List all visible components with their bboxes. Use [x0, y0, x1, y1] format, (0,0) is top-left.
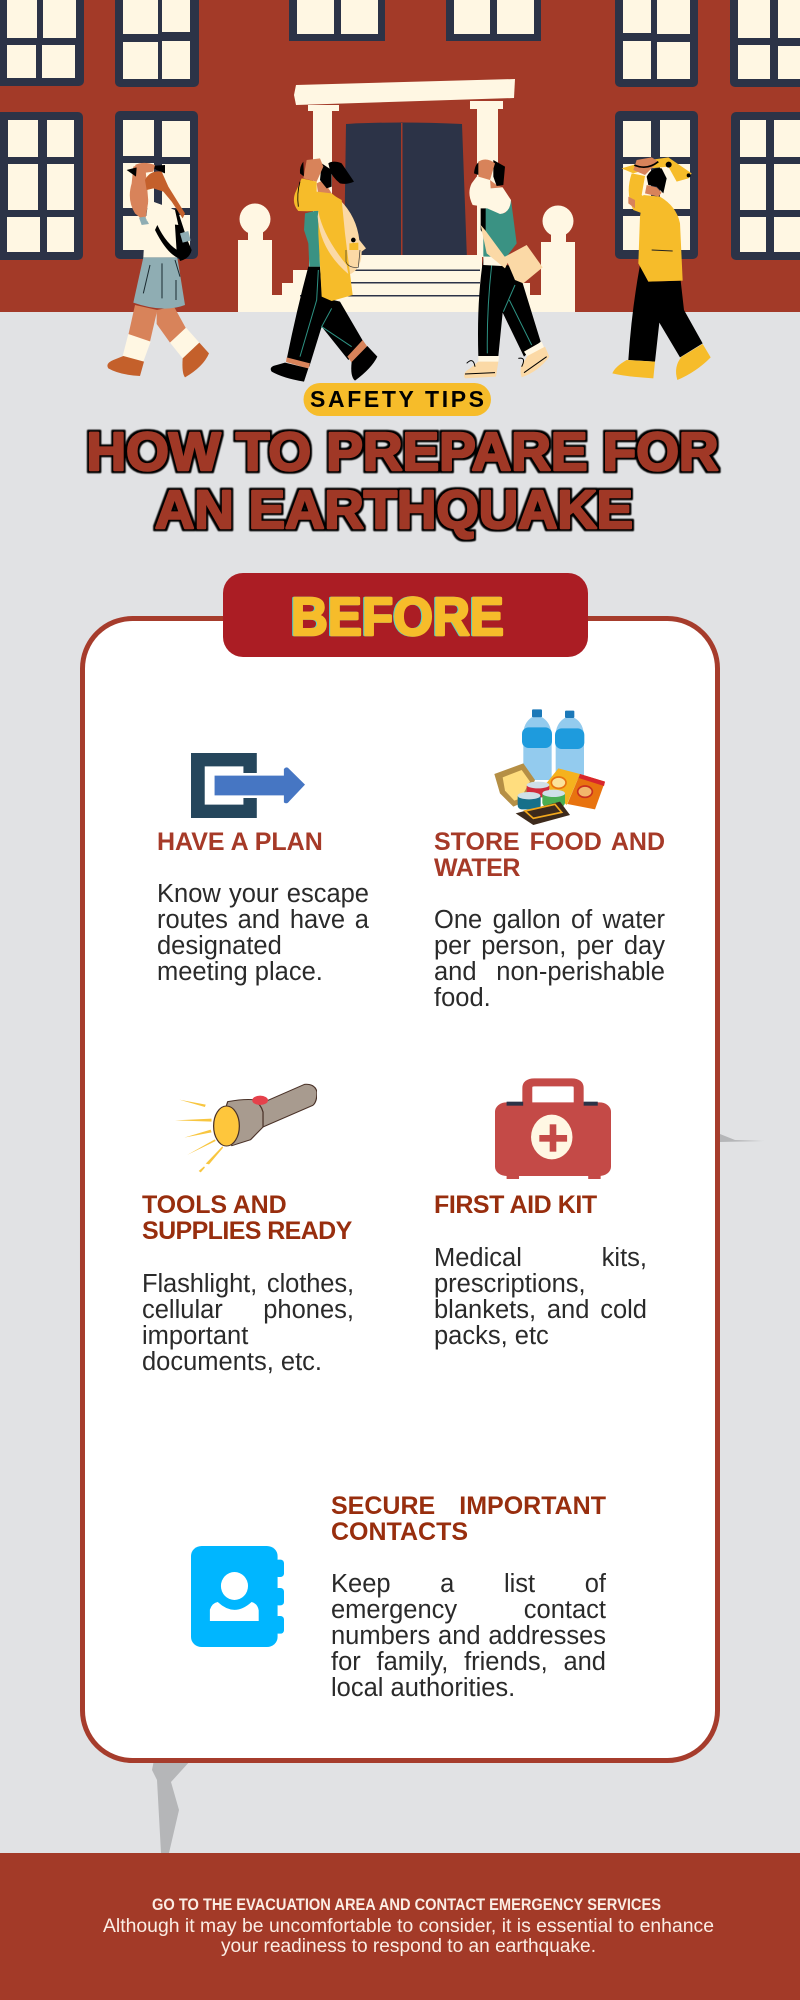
- text block: designated: [157, 932, 282, 960]
- text block: Know your escape: [157, 880, 369, 908]
- building wall: [0, 0, 800, 312]
- text block: documents, etc.: [142, 1348, 322, 1376]
- heading: SECURE IMPORTANT: [331, 1492, 606, 1520]
- heading: SUPPLIES READY: [142, 1217, 352, 1245]
- panel: tools and supplies: [142, 1084, 354, 1376]
- icon: flashlight: [176, 1084, 317, 1172]
- title: HOW TO PREPARE FOR: [86, 422, 718, 482]
- upper windows: [0, 0, 800, 87]
- text block: [434, 1244, 647, 1350]
- text block: numbers and addresses: [331, 1622, 606, 1650]
- footer band: [0, 1853, 800, 2000]
- portico and entrance: [238, 79, 575, 312]
- text block: Medical kits,: [434, 1244, 647, 1272]
- text block: [434, 906, 665, 1012]
- person: man with yellow jacket: [612, 157, 711, 380]
- card outline: [82, 618, 718, 1760]
- heading: [142, 1191, 352, 1245]
- text block: emergency contact: [331, 1596, 606, 1624]
- text block: [142, 1270, 354, 1376]
- text block: meeting place.: [157, 958, 323, 986]
- heading: FIRST AID KIT: [434, 1191, 597, 1219]
- heading: STORE FOOD AND: [434, 828, 665, 856]
- text block: [331, 1570, 606, 1702]
- text block: for family, friends, and: [331, 1648, 606, 1676]
- title: AN EARTHQUAKE: [155, 480, 633, 540]
- panel: first aid kit: [434, 1078, 647, 1350]
- heading: TOOLS AND: [142, 1191, 286, 1219]
- icon: contact book: [191, 1546, 284, 1647]
- heading: [434, 828, 665, 882]
- panel: have a plan: [157, 753, 369, 986]
- balusters: [238, 204, 575, 312]
- heading: HAVE A PLAN: [157, 828, 323, 856]
- title: [86, 422, 718, 540]
- person: woman with ponytail: [271, 158, 377, 382]
- text block: per person, per day: [434, 932, 665, 960]
- text block: Keep a list of: [331, 1570, 606, 1598]
- footer band: your readiness to respond to an earthquake.: [221, 1936, 596, 1957]
- before badge: [223, 573, 588, 657]
- ground cracks: [152, 1134, 764, 1853]
- text block: local authorities.: [331, 1674, 515, 1702]
- text block: packs, etc: [434, 1322, 549, 1350]
- icon: exit arrow: [191, 753, 305, 818]
- text block: important: [142, 1322, 248, 1350]
- icon: bottles and food: [494, 709, 605, 825]
- footer band: Although it may be uncomfortable to consider, it is essential to enhance: [103, 1916, 714, 1937]
- heading: CONTACTS: [331, 1518, 468, 1546]
- safety tips pill: SAFETY TIPS: [310, 386, 484, 412]
- text block: cellular phones,: [142, 1296, 354, 1324]
- text block: routes and have a: [157, 906, 369, 934]
- text block: food.: [434, 984, 491, 1012]
- text block: [157, 880, 369, 986]
- text block: Flashlight, clothes,: [142, 1270, 354, 1298]
- text block: One gallon of water: [434, 906, 665, 934]
- before badge: BEFORE: [291, 587, 504, 647]
- lower windows: [0, 111, 800, 260]
- person: girl with skirt: [107, 163, 209, 377]
- panel: store food and water: [434, 709, 665, 1012]
- footer band: GO TO THE EVACUATION AREA AND CONTACT EMERGENCY SERVICES: [152, 1896, 661, 1914]
- person: woman with shoulder bag: [464, 160, 549, 378]
- text block: prescriptions,: [434, 1270, 586, 1298]
- text block: blankets, and cold: [434, 1296, 647, 1324]
- panel: secure important contacts: [191, 1492, 606, 1702]
- heading: WATER: [434, 854, 520, 882]
- text block: and non-perishable: [434, 958, 665, 986]
- heading: [331, 1492, 606, 1546]
- icon: first aid case: [495, 1078, 611, 1179]
